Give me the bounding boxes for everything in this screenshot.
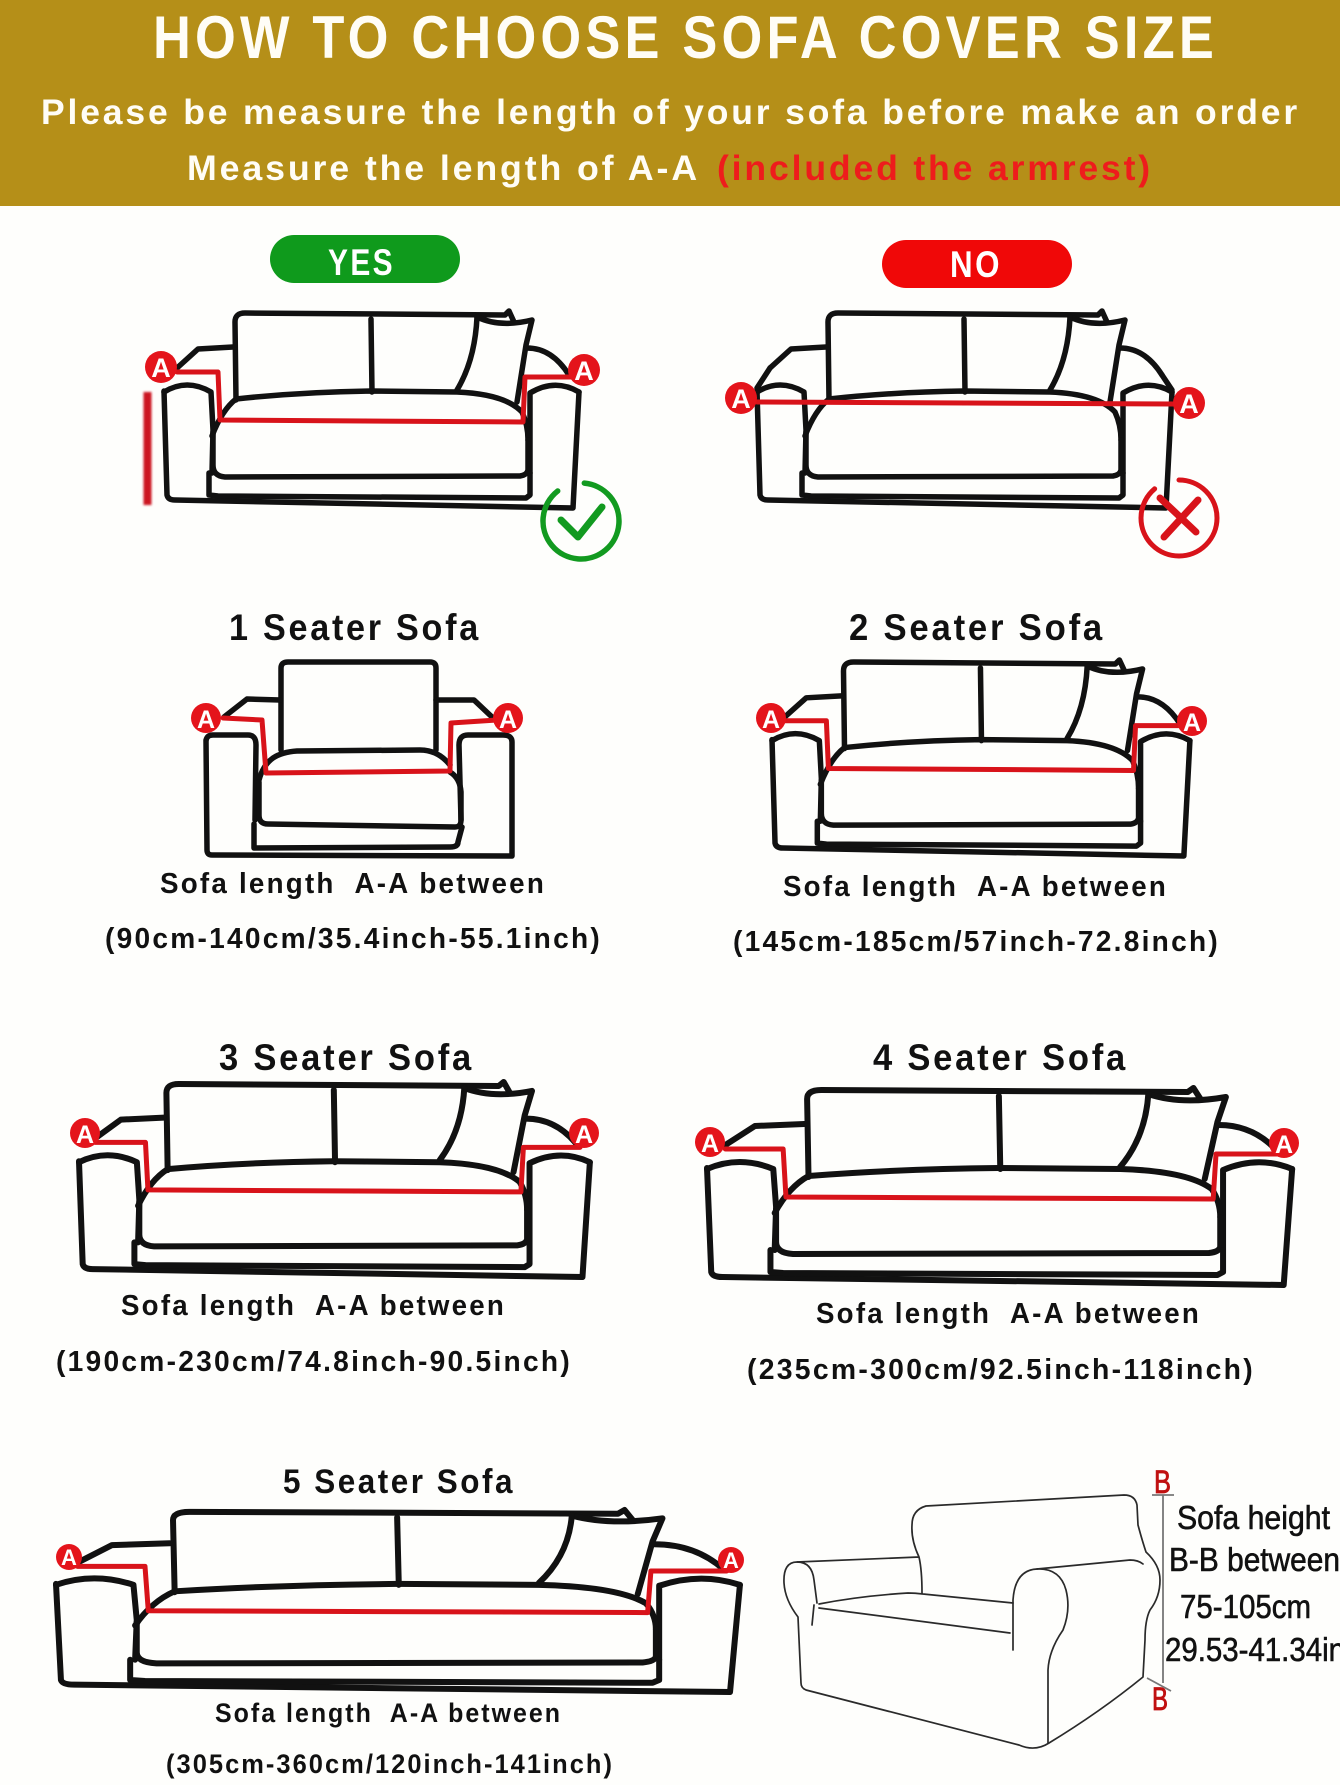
- sofa drawing: A: [76, 1121, 94, 1149]
- bottom B marker: B: [1152, 1681, 1168, 1717]
- heading: 4 Seater Sofa: [873, 1037, 1128, 1078]
- size range: (235cm-300cm/92.5inch-118inch): [747, 1354, 1255, 1386]
- yes pill: YES: [328, 242, 395, 283]
- icon: red cross: [1141, 480, 1217, 556]
- top B marker: B: [1154, 1464, 1171, 1500]
- yes pill: [270, 235, 460, 283]
- correct sofa diagram: A: [574, 356, 594, 386]
- sofa drawing: A: [762, 706, 780, 734]
- header banner: [0, 0, 1340, 206]
- heading: 5 Seater Sofa: [283, 1463, 515, 1501]
- panel: 2 seater sofa: [733, 607, 1220, 958]
- measurement line: Measure the length of A-A: [187, 149, 700, 188]
- size label: Sofa length A-A between: [121, 1290, 506, 1322]
- panel: 4 seater sofa: [695, 1037, 1299, 1386]
- sofa drawing: [191, 662, 523, 856]
- height text 3: 75-105cm: [1180, 1588, 1311, 1625]
- sofa drawing: A: [575, 1121, 593, 1149]
- wrong sofa diagram: A: [1179, 389, 1199, 419]
- height measure line: [1147, 1495, 1174, 1691]
- no pill: [882, 240, 1072, 288]
- icon: green check: [540, 480, 622, 562]
- wrong sofa diagram: A: [731, 384, 751, 414]
- size range: (305cm-360cm/120inch-141inch): [166, 1749, 614, 1779]
- sofa drawing: [70, 1082, 599, 1277]
- correct sofa diagram: A: [151, 353, 171, 383]
- heading: 1 Seater Sofa: [229, 607, 481, 648]
- title: HOW TO CHOOSE SOFA COVER SIZE: [153, 4, 1218, 71]
- size range: (145cm-185cm/57inch-72.8inch): [733, 926, 1220, 958]
- armchair outline: [784, 1495, 1160, 1748]
- instruction line: Please be measure the length of your sofa before make an order: [41, 93, 1300, 132]
- sofa drawing: A: [197, 706, 215, 734]
- sofa drawing: [756, 660, 1207, 856]
- sofa drawing: A: [1275, 1131, 1293, 1159]
- heading: 2 Seater Sofa: [849, 607, 1105, 648]
- size label: Sofa length A-A between: [160, 868, 546, 900]
- sofa drawing: A: [61, 1545, 77, 1570]
- panel: sofa height: [784, 1464, 1340, 1748]
- height text 1: Sofa height: [1177, 1499, 1330, 1536]
- sofa drawing: [56, 1510, 744, 1692]
- red armrest note: (included the armrest): [717, 149, 1153, 188]
- panel: 1 seater sofa: [105, 607, 602, 955]
- panel: 5 seater sofa: [56, 1463, 744, 1779]
- sofa drawing: A: [701, 1130, 719, 1158]
- correct sofa diagram: [144, 311, 600, 508]
- heading: 3 Seater Sofa: [219, 1037, 474, 1078]
- sofa drawing: A: [723, 1548, 739, 1573]
- size range: (90cm-140cm/35.4inch-55.1inch): [105, 923, 602, 955]
- size label: Sofa length A-A between: [816, 1298, 1201, 1330]
- size range: (190cm-230cm/74.8inch-90.5inch): [56, 1346, 572, 1378]
- size label: Sofa length A-A between: [215, 1698, 562, 1728]
- wrong sofa diagram: [725, 311, 1205, 508]
- sofa drawing: A: [499, 706, 517, 734]
- sofa drawing: [695, 1088, 1299, 1285]
- panel: 3 seater sofa: [56, 1037, 599, 1378]
- no pill: NO: [950, 244, 1002, 285]
- sofa drawing: A: [1183, 709, 1201, 737]
- size label: Sofa length A-A between: [783, 871, 1168, 903]
